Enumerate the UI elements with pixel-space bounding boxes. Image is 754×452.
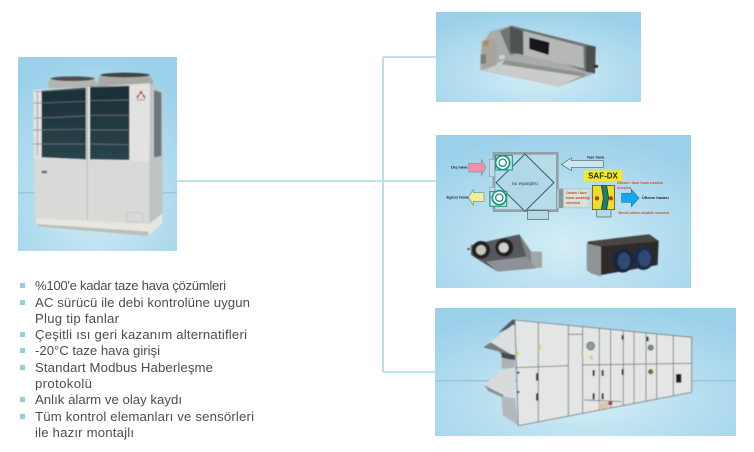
icon: logo — [136, 90, 146, 101]
bullets — [20, 283, 25, 419]
panel: ducted indoor unit — [436, 12, 641, 102]
text block: feature list: %100'e kadar taze hava çözümleri — [35, 278, 226, 293]
text block: feature list: Çeşitli ısı geri kazanım alternatifleri — [35, 327, 247, 342]
text block: feature list: AC sürücü ile debi kontrolüne uygun — [35, 295, 250, 310]
text block: feature list: Anlık alarm ve olay kaydı — [35, 392, 182, 407]
text block: feature list: -20°C taze hava girişi — [35, 343, 160, 358]
icon: ducted unit — [480, 26, 598, 87]
arrow: outside air: Dış hava — [451, 165, 468, 170]
duct: hava sıcaklığı — [566, 196, 590, 200]
icon: heat recovery unit — [467, 234, 542, 272]
arrow: exhaust air — [446, 189, 484, 205]
panel: SAF-DX diagram — [436, 135, 691, 288]
text block: feature list: ile hazır montajlı — [35, 425, 134, 440]
arrow: supply air — [622, 189, 669, 207]
text block: feature list: protokolü — [35, 376, 92, 391]
chart: heat recovery schematic — [446, 153, 669, 277]
icon: outdoor VRF unit — [33, 73, 163, 236]
duct — [557, 189, 593, 208]
arrow: outside air — [451, 159, 486, 176]
sensor labels: Üfleme / taze hava sıcaklık — [617, 180, 664, 185]
icon: AHU — [483, 319, 692, 426]
arrow: fresh air — [561, 156, 605, 171]
sensor labels: sensörü — [617, 186, 631, 190]
SAF-DX label: SAF-DX — [588, 172, 619, 181]
text block: feature list: Plug tip fanlar — [35, 311, 120, 326]
SAF-DX coil box — [592, 186, 615, 217]
text block: feature list: Tüm kontrol elemanları ve sensörleri — [35, 409, 254, 424]
arrow: exhaust air: Egzoz hava — [446, 195, 469, 200]
arrow: fresh air: Taze hava — [587, 156, 605, 160]
duct: sensörü — [566, 201, 580, 205]
icon: fan top — [496, 155, 512, 170]
icon: fan bottom — [490, 191, 507, 206]
heat exchanger housing — [489, 153, 557, 220]
sensor labels — [617, 180, 669, 215]
duct: Ortam / taze — [566, 191, 587, 195]
panel: air handling unit — [435, 308, 736, 436]
SAF-DX label — [584, 170, 622, 181]
heat exchanger housing: Isı eşanjörü — [512, 181, 538, 187]
sensor labels: Nemli ortam sıcaklık sensörü — [619, 211, 669, 215]
text block: feature list — [20, 278, 254, 440]
panel: outdoor unit — [18, 57, 177, 251]
arrow: supply air: Üfleme havası — [642, 195, 669, 200]
icon: SAF-DX unit — [587, 234, 659, 277]
text block: feature list: Standart Modbus Haberleşme — [35, 360, 213, 375]
connector lines — [177, 57, 436, 372]
